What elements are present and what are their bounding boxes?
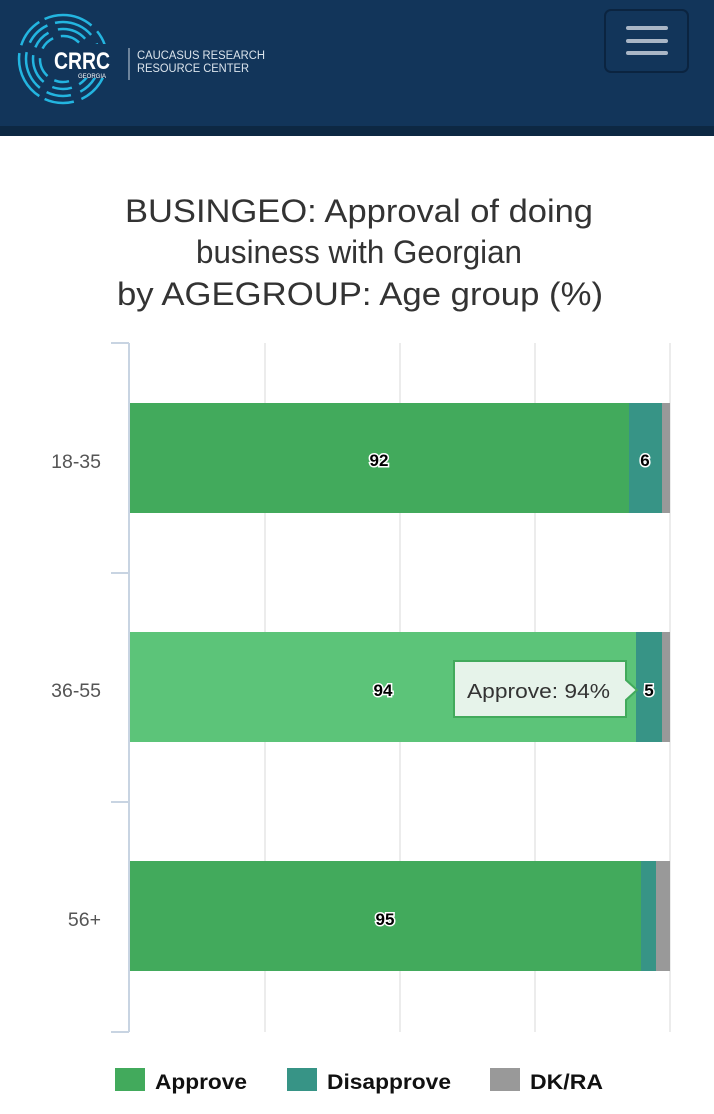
logo: GEORGIA (78, 74, 106, 80)
bar: 18-35: 6 (640, 451, 650, 470)
bar: 18-35: 92 (370, 451, 388, 470)
menu button (605, 10, 688, 72)
bar: 56+: 95 (376, 910, 394, 929)
title: business with Georgian (196, 234, 522, 270)
bar: 36-55 (130, 632, 670, 742)
tooltip: Approve: 94% (467, 681, 610, 703)
y labels: 56+ (68, 909, 101, 931)
bar: 36-55: 94 (374, 681, 393, 700)
grid lines (265, 343, 670, 1032)
tooltip (454, 661, 637, 717)
bar: 18-35 (130, 403, 670, 513)
logo: CRRC (54, 48, 110, 75)
logo: CAUCASUS RESEARCH (137, 50, 265, 62)
legend: Disapprove (327, 1071, 451, 1094)
logo (19, 15, 265, 103)
title (117, 193, 603, 312)
y axis (111, 343, 129, 1032)
title: by AGEGROUP: Age group (%) (117, 276, 603, 312)
y labels: 36-55 (51, 680, 101, 702)
bar: 56+ (130, 861, 670, 971)
bar: 36-55: 5 (644, 681, 654, 700)
legend: Approve (155, 1071, 247, 1094)
y labels: 18-35 (51, 451, 101, 473)
title: BUSINGEO: Approval of doing (125, 193, 593, 229)
y labels (51, 451, 101, 931)
legend (115, 1068, 603, 1094)
header bar (0, 0, 714, 136)
logo: RESOURCE CENTER (137, 63, 249, 75)
legend: DK/RA (530, 1071, 603, 1094)
